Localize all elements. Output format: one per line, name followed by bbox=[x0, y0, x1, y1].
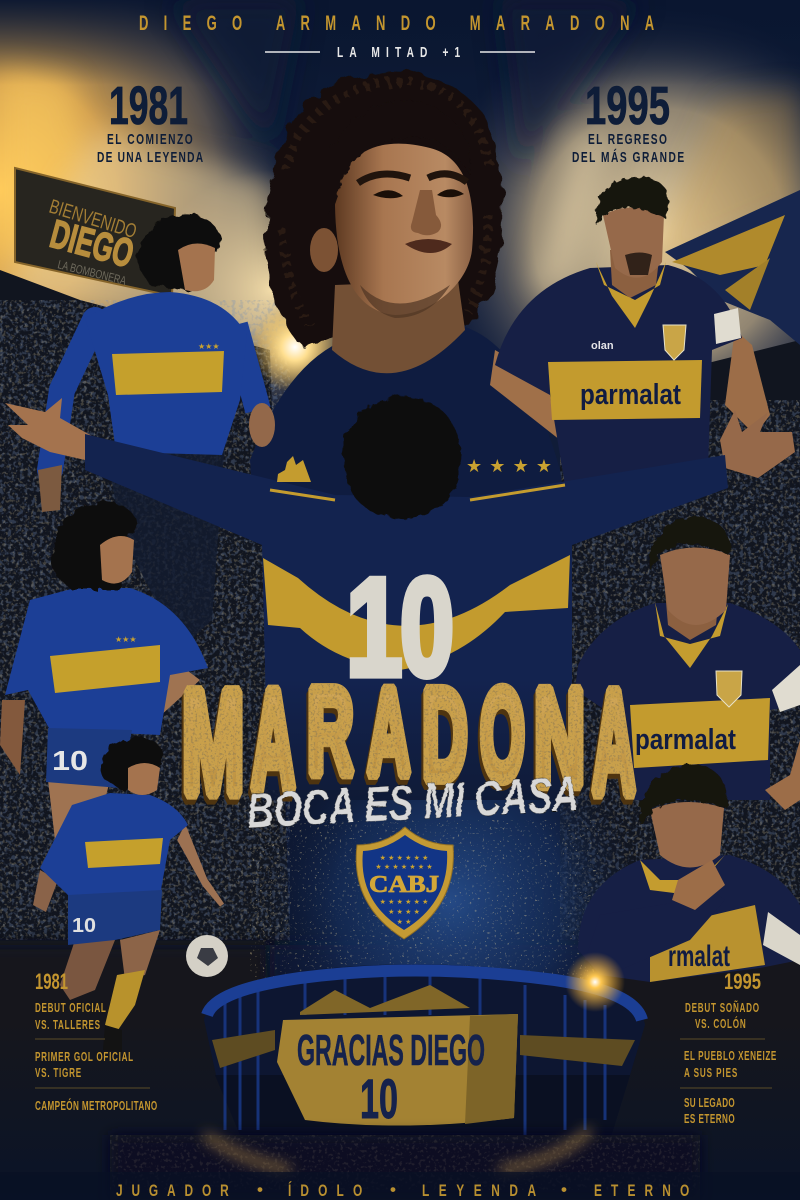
gold seats bbox=[300, 985, 470, 1015]
shield lower stars: ★ ★ ★ ★ ★ ★ bbox=[380, 898, 428, 906]
left era heading bbox=[97, 76, 203, 166]
player 1995 middle bbox=[575, 517, 800, 810]
player face bbox=[128, 763, 160, 795]
subtitle: BOCA ES MI CASA bbox=[246, 766, 580, 839]
player hand bbox=[672, 860, 725, 910]
adidas mark bbox=[277, 456, 311, 482]
timeline 1995: A SUS PIES bbox=[684, 1066, 737, 1081]
title depth: D bbox=[420, 667, 466, 812]
sign: Bienvenido Diego: DIEGO bbox=[46, 212, 138, 276]
right arm bbox=[765, 740, 800, 810]
flag right bbox=[665, 190, 800, 345]
portrait neck bbox=[332, 280, 465, 373]
tier girders bbox=[225, 975, 605, 1135]
player collar bbox=[655, 602, 728, 668]
right era heading bbox=[572, 76, 685, 166]
portrait jersey bbox=[250, 326, 570, 540]
title letters: A bbox=[367, 662, 411, 801]
flood light bbox=[565, 952, 625, 1012]
title depth: M bbox=[180, 664, 242, 830]
jersey lower fade bbox=[262, 680, 574, 800]
back band bbox=[263, 555, 570, 670]
left stands bbox=[0, 270, 290, 945]
timeline 1995: ES ETERNO bbox=[684, 1112, 735, 1127]
portrait eyes bbox=[373, 189, 464, 198]
player band bbox=[650, 905, 765, 982]
player band bbox=[85, 838, 163, 868]
title depth: R bbox=[305, 668, 352, 805]
portrait beard shadow bbox=[360, 285, 450, 318]
player jersey bbox=[495, 265, 742, 485]
footer words: • bbox=[257, 1180, 263, 1199]
shorts number: 10 bbox=[72, 915, 96, 937]
timeline 1981: VS. TALLERES bbox=[35, 1018, 100, 1033]
player left arm bbox=[50, 320, 95, 470]
title letters: D bbox=[422, 662, 468, 807]
title letters: O bbox=[480, 663, 525, 807]
title depth: A bbox=[590, 665, 634, 829]
sign: Bienvenido Diego bbox=[15, 168, 175, 296]
main title MARADONA bbox=[180, 659, 636, 830]
title depth bbox=[180, 664, 634, 830]
shorts number: 10 bbox=[52, 745, 88, 776]
player hair bbox=[102, 738, 162, 792]
player right leg bbox=[120, 930, 160, 980]
player sock bbox=[105, 970, 145, 1030]
title letters: A bbox=[251, 661, 295, 821]
lower shade bbox=[215, 1075, 630, 1140]
player left arm bbox=[0, 700, 25, 775]
shoulder trim bbox=[270, 485, 565, 500]
captain armband bbox=[714, 308, 741, 344]
banner text: GRACIAS DIEGO bbox=[297, 1026, 485, 1075]
shield initials: CABJ bbox=[369, 872, 439, 898]
player 1981 lower bbox=[33, 738, 228, 1052]
player jersey bbox=[578, 855, 800, 982]
hair highlights bbox=[282, 82, 490, 325]
title depth: N bbox=[532, 667, 583, 820]
crest bbox=[716, 671, 742, 707]
player hair bbox=[138, 214, 220, 292]
right era heading: 1995 bbox=[585, 76, 670, 136]
player shorts bbox=[68, 890, 162, 945]
right era heading: DEL MÁS GRANDE bbox=[572, 148, 685, 166]
player left arm bbox=[33, 870, 58, 912]
timeline 1995: 1995 bbox=[724, 969, 761, 994]
player stars: ★★★ bbox=[198, 342, 220, 351]
player band bbox=[112, 351, 224, 395]
portrait hair bbox=[265, 71, 503, 345]
player face bbox=[178, 243, 215, 291]
player sleeve band bbox=[763, 912, 800, 965]
player collar bbox=[596, 262, 666, 328]
player right forearm bbox=[135, 665, 200, 725]
portrait fringe bbox=[330, 100, 471, 215]
timeline 1981: PRIMER GOL OFICIAL bbox=[35, 1050, 134, 1065]
player stars: ★★★ bbox=[115, 635, 137, 644]
player neck bbox=[665, 585, 720, 640]
right stands bbox=[560, 340, 800, 945]
back number bbox=[346, 549, 454, 705]
left era heading: 1981 bbox=[109, 76, 188, 136]
upper ring bbox=[207, 970, 642, 1020]
player hair bbox=[640, 764, 726, 825]
right era heading: EL REGRESO bbox=[588, 130, 667, 148]
player beard bbox=[625, 252, 652, 275]
player right arm bbox=[725, 330, 770, 435]
portrait nose bbox=[411, 190, 441, 235]
footer words bbox=[116, 1180, 689, 1200]
sponsor parmalat: rmalat bbox=[668, 940, 730, 973]
banner number: 10 bbox=[360, 1067, 398, 1130]
sponsor olan: olan bbox=[591, 340, 614, 352]
player band bbox=[548, 360, 702, 420]
pitch bbox=[0, 945, 800, 1200]
timeline 1995: VS. COLÓN bbox=[695, 1016, 746, 1032]
banner right shade bbox=[465, 1014, 518, 1124]
player head bbox=[650, 802, 724, 868]
timeline 1995: DEBUT SOÑADO bbox=[685, 1000, 759, 1016]
timeline 1981: 1981 bbox=[35, 969, 68, 994]
CABJ shield bbox=[356, 827, 453, 939]
title letters: N bbox=[534, 662, 585, 815]
player right arm bbox=[180, 830, 222, 905]
portrait ear bbox=[310, 228, 338, 272]
player legs bbox=[105, 440, 225, 650]
player left forearm bbox=[38, 465, 62, 512]
player arm bbox=[585, 885, 725, 970]
player right hand bbox=[249, 403, 275, 447]
timeline 1995 bbox=[680, 969, 776, 1127]
player jersey bbox=[85, 292, 247, 455]
sleeve band bbox=[772, 665, 800, 712]
player band bbox=[630, 698, 770, 768]
player band bbox=[50, 645, 160, 693]
title depth: A bbox=[365, 667, 409, 806]
top heading: DIEGO ARMANDO MARADONA bbox=[139, 11, 654, 35]
timeline 1981: VS. TIGRE bbox=[35, 1066, 81, 1081]
back head hair bbox=[343, 397, 461, 518]
shield second stars: ★ ★ ★ ★ ★ ★ ★ bbox=[375, 863, 433, 871]
sun flare bbox=[250, 302, 340, 392]
player 1981 middle bbox=[0, 502, 208, 840]
timeline 1981: DEBUT OFICIAL bbox=[35, 1001, 106, 1016]
player 1995 top bbox=[490, 176, 770, 485]
player jersey bbox=[40, 793, 188, 895]
top sub heading: LA MITAD +1 bbox=[337, 44, 460, 60]
sponsor parmalat: parmalat bbox=[635, 724, 736, 756]
left era heading: DE UNA LEYENDA bbox=[97, 148, 203, 166]
sky streaks bbox=[0, 0, 800, 340]
player jersey bbox=[5, 588, 208, 735]
portrait mouth bbox=[405, 239, 452, 253]
footer words: • bbox=[390, 1180, 396, 1199]
player boot bbox=[103, 1025, 122, 1052]
footer words: • bbox=[561, 1180, 567, 1199]
player 1995 lower bbox=[578, 764, 800, 982]
banner bbox=[277, 1014, 518, 1126]
player left leg bbox=[60, 940, 115, 1000]
player neck bbox=[610, 250, 660, 298]
timeline 1995: SU LEGADO bbox=[684, 1096, 735, 1111]
title depth: O bbox=[478, 668, 523, 812]
title letters: A bbox=[592, 660, 636, 824]
title letters: R bbox=[307, 663, 354, 800]
nebula bbox=[260, 710, 640, 1090]
portrait brows bbox=[358, 174, 467, 183]
back jersey bbox=[85, 434, 728, 790]
title letters bbox=[182, 659, 636, 825]
left era heading: EL COMIENZO bbox=[107, 130, 193, 148]
main portrait bbox=[250, 71, 570, 540]
player head bbox=[603, 208, 664, 278]
stadium bbox=[204, 952, 645, 1140]
football bbox=[186, 935, 228, 977]
player jersey bbox=[575, 603, 800, 800]
player 1981 top bbox=[38, 214, 275, 650]
right hand bbox=[720, 410, 795, 478]
player right arm bbox=[235, 325, 258, 410]
bottom crowd bbox=[0, 1130, 800, 1200]
timeline 1981: CAMPEÓN METROPOLITANO bbox=[35, 1098, 157, 1114]
player hair bbox=[650, 517, 730, 570]
title depth: A bbox=[249, 666, 293, 826]
shield bottom stars: ★ ★ bbox=[397, 918, 411, 926]
back number: 0 bbox=[400, 550, 454, 705]
sign: Bienvenido Diego: LA BOMBONERA bbox=[56, 257, 128, 288]
timeline 1995: EL PUEBLO XENEIZE bbox=[684, 1049, 776, 1064]
central back figure bbox=[5, 397, 795, 800]
title letters: M bbox=[182, 659, 244, 825]
player shorts bbox=[46, 728, 132, 788]
portrait face bbox=[335, 144, 473, 315]
sponsor parmalat: parmalat bbox=[580, 379, 681, 411]
player left arm bbox=[490, 350, 585, 440]
player face bbox=[100, 536, 134, 584]
shield upper stars: ★ ★ ★ ★ ★ ★ bbox=[380, 854, 428, 862]
left hand bbox=[5, 398, 92, 460]
timeline 1981 bbox=[35, 969, 157, 1114]
player head bbox=[660, 548, 730, 625]
four stars: ★★★★ bbox=[466, 456, 552, 477]
player hair bbox=[595, 176, 669, 225]
player collar bbox=[640, 855, 725, 895]
back number: 1 bbox=[346, 549, 402, 705]
sign: Bienvenido Diego: BIENVENIDO bbox=[47, 196, 139, 243]
player hair bbox=[52, 502, 137, 590]
crest on jersey bbox=[663, 325, 686, 360]
player thighs bbox=[48, 780, 110, 840]
shield third stars: ★ ★ ★ ★ bbox=[388, 908, 420, 916]
